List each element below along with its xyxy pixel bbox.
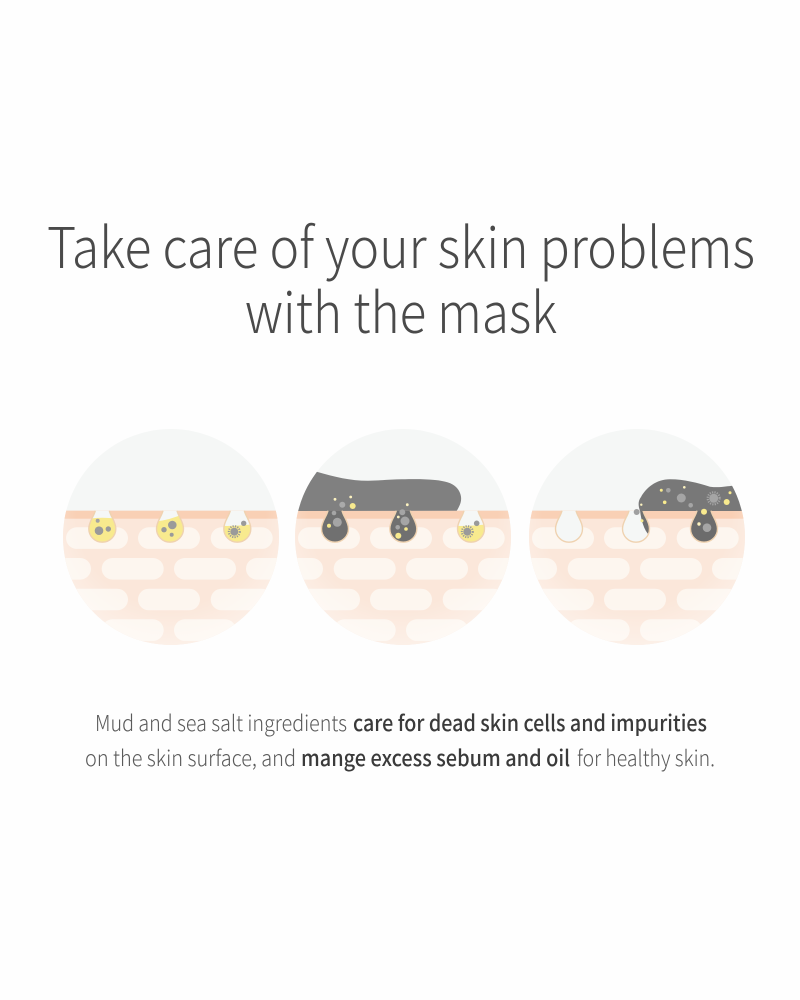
pore with bacteria <box>456 510 486 543</box>
title <box>47 204 755 350</box>
panel: skin before mask <box>63 429 279 645</box>
panel: mask removed <box>529 429 745 645</box>
description text: care for dead skin cells and impurities <box>353 706 707 738</box>
description text: mange excess sebum and oil <box>301 741 570 773</box>
pore filled with mud <box>690 511 718 542</box>
lifted particles <box>634 486 732 522</box>
description text: Mud and sea salt ingredients <box>95 706 347 738</box>
mud mask lifting off <box>639 479 748 511</box>
pore filled with mud <box>390 509 417 542</box>
pore filled with mud <box>322 511 348 542</box>
clean pore <box>556 511 582 542</box>
partly cleaned pore <box>622 510 652 542</box>
pore with sebum and dots <box>156 510 184 543</box>
panel: mask applied <box>295 429 511 645</box>
mud mask layer <box>290 472 461 511</box>
title: with the mask <box>245 269 557 350</box>
description text: for healthy skin. <box>577 741 715 773</box>
mud particles <box>334 496 409 509</box>
description text <box>85 706 715 773</box>
pore with sebum and dots <box>88 510 116 543</box>
pore with bacteria <box>223 510 252 543</box>
description text: on the skin surface, and <box>85 741 296 773</box>
